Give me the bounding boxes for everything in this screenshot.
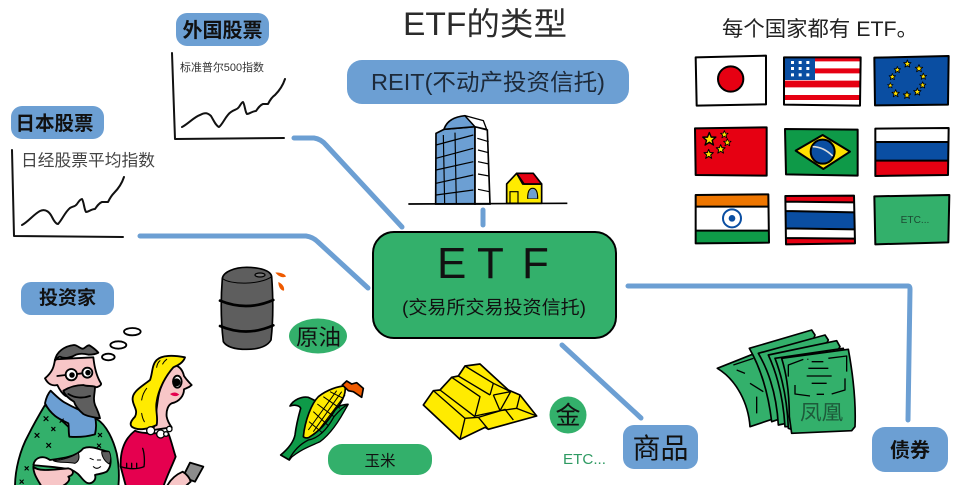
woman bbox=[121, 356, 203, 485]
chart: S&P 500 bbox=[172, 53, 285, 139]
label: REIT: REIT(不动产投资信托) bbox=[371, 69, 605, 95]
central box: ETF: T bbox=[477, 239, 504, 288]
label: REIT bbox=[347, 60, 629, 104]
label: crude oil bbox=[289, 318, 347, 354]
central box: ETF: (交易所交易投资信托) bbox=[402, 297, 586, 318]
icon: bond certificates bbox=[717, 330, 855, 433]
flag: Japan bbox=[696, 56, 766, 106]
icon: corn bbox=[281, 381, 363, 460]
label: investors bbox=[21, 282, 114, 315]
label: Japanese stocks bbox=[11, 106, 104, 139]
icon: office tower and house bbox=[408, 116, 567, 204]
label: corn bbox=[328, 444, 432, 475]
central box: ETF: F bbox=[522, 239, 549, 288]
illustration: investors bbox=[15, 328, 203, 485]
flag: ETC: ETC... bbox=[901, 215, 929, 226]
label: investors: 投资家 bbox=[39, 286, 96, 309]
icon: bond certificates: 凤凰 bbox=[800, 401, 844, 424]
label: gold: 金 bbox=[555, 402, 581, 430]
flag: EU bbox=[874, 56, 949, 105]
central box: ETF bbox=[373, 232, 616, 338]
label: bonds: 债券 bbox=[890, 439, 930, 462]
label: commodities: 商品 bbox=[632, 433, 689, 464]
flags grid bbox=[695, 56, 949, 244]
label: crude oil: 原油 bbox=[296, 325, 341, 350]
label: foreign stocks bbox=[176, 13, 269, 46]
flag: USA bbox=[784, 57, 861, 106]
text: ETC: ETC... bbox=[563, 451, 606, 468]
thought bubbles bbox=[102, 328, 141, 360]
flag: Thailand bbox=[785, 196, 855, 244]
chart: S&P 500: 标准普尔500指数 bbox=[180, 60, 264, 74]
title: ETF的类型 bbox=[403, 6, 567, 42]
flag: India bbox=[696, 194, 769, 243]
icon: oil barrel bbox=[220, 267, 286, 349]
man bbox=[15, 345, 119, 485]
flag: Brazil bbox=[785, 129, 858, 176]
label: Japanese stocks: 日本股票 bbox=[15, 113, 94, 135]
label: foreign stocks: 外国股票 bbox=[182, 19, 262, 42]
chart: Nikkei: 日经股票平均指数 bbox=[21, 151, 156, 170]
icon: gold bars bbox=[423, 364, 537, 439]
heading: every country has ETF: 每个国家都有 ETF。 bbox=[722, 18, 918, 41]
central box: ETF: E bbox=[437, 239, 466, 288]
connector lines bbox=[140, 138, 910, 420]
flag: Russia bbox=[875, 128, 949, 176]
label: corn: 玉米 bbox=[364, 452, 396, 470]
flag: ETC bbox=[874, 195, 949, 244]
label: gold bbox=[550, 396, 586, 434]
chart: Nikkei bbox=[12, 150, 156, 237]
label: commodities bbox=[623, 425, 698, 469]
flag: China bbox=[695, 127, 767, 176]
label: bonds bbox=[872, 427, 948, 472]
